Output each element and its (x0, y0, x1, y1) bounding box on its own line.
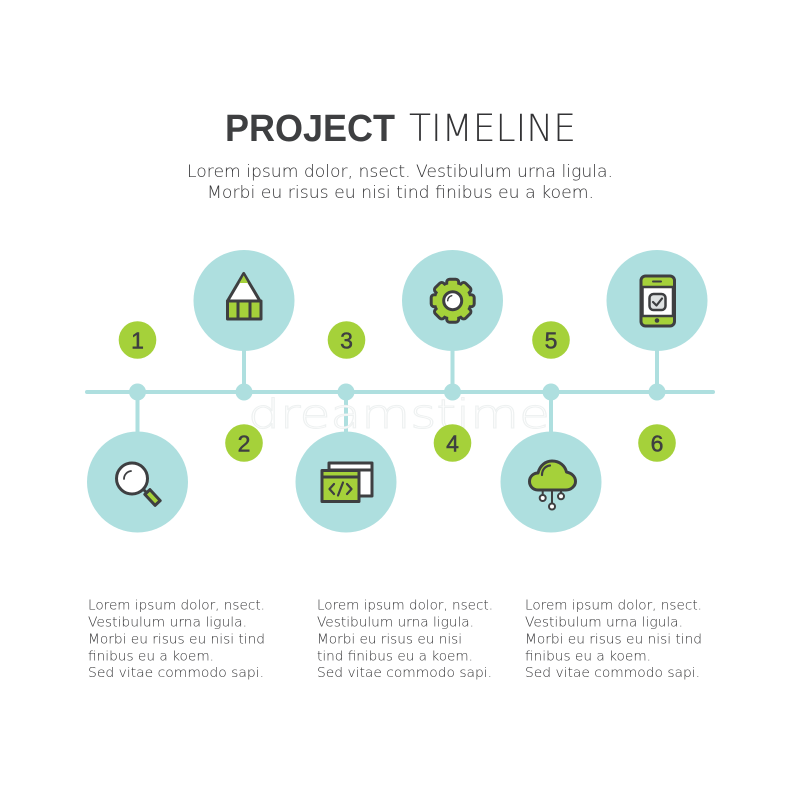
subtitle: Lorem ipsum dolor, nsect. Vestibulum urna ligula. (187, 162, 613, 181)
icon: smartphone (606, 250, 708, 351)
icon: code windows (296, 432, 396, 532)
icon: magnifying glass (87, 432, 188, 532)
timeline axis (87, 348, 713, 434)
step 6 badge: 6 (651, 430, 663, 456)
text block: column 3 (525, 598, 702, 681)
text block: column 3: Lorem ipsum dolor, nsect. (525, 598, 702, 614)
text block: column 2: Sed vitae commodo sapi. (317, 665, 492, 681)
step 2 badge (225, 424, 263, 462)
text block: column 2: tind finibus eu a koem. (317, 648, 473, 664)
text block: column 2: Lorem ipsum dolor, nsect. (317, 598, 493, 614)
text block: column 1: Morbi eu risus eu nisi tind (88, 632, 265, 648)
text block: column 1 (88, 598, 265, 681)
title: PROJECT (225, 108, 395, 150)
icon: pencil (194, 250, 294, 351)
watermark: dreamstime (248, 392, 550, 438)
step 1 badge: 1 (131, 328, 144, 354)
text block: column 2 (317, 598, 493, 681)
step 6 badge (638, 424, 676, 462)
step 2 badge: 2 (238, 430, 250, 456)
icon: gear (402, 250, 503, 351)
text block: column 2: Vestibulum urna ligula. (317, 614, 474, 630)
text block: column 3: Vestibulum urna ligula. (525, 614, 683, 630)
text block: column 2: Morbi eu risus eu nisi (317, 632, 462, 648)
step 5 badge: 5 (545, 328, 557, 354)
text block: column 3: Morbi eu risus eu nisi tind (525, 632, 702, 648)
text block: column 1: finibus eu a koem. (88, 648, 214, 664)
subtitle (187, 162, 613, 202)
title: TIMELINE (409, 107, 576, 150)
step 4 badge: 4 (446, 430, 459, 456)
step 1 badge (119, 321, 156, 359)
icon: cloud network (500, 432, 602, 532)
text block: column 1: Vestibulum urna ligula. (88, 614, 247, 630)
subtitle: Morbi eu risus eu nisi tind finibus eu a koem. (207, 183, 594, 202)
step 4 badge (434, 424, 471, 462)
text block: column 3: Sed vitae commodo sapi. (525, 665, 700, 681)
text block: column 3: finibus eu a koem. (525, 648, 651, 664)
step 3 badge (328, 321, 365, 359)
step 5 badge (532, 321, 570, 359)
step 3 badge: 3 (340, 328, 353, 354)
title (225, 107, 576, 150)
text block: column 1: Lorem ipsum dolor, nsect. (88, 598, 265, 614)
text block: column 1: Sed vitae commodo sapi. (88, 665, 264, 681)
